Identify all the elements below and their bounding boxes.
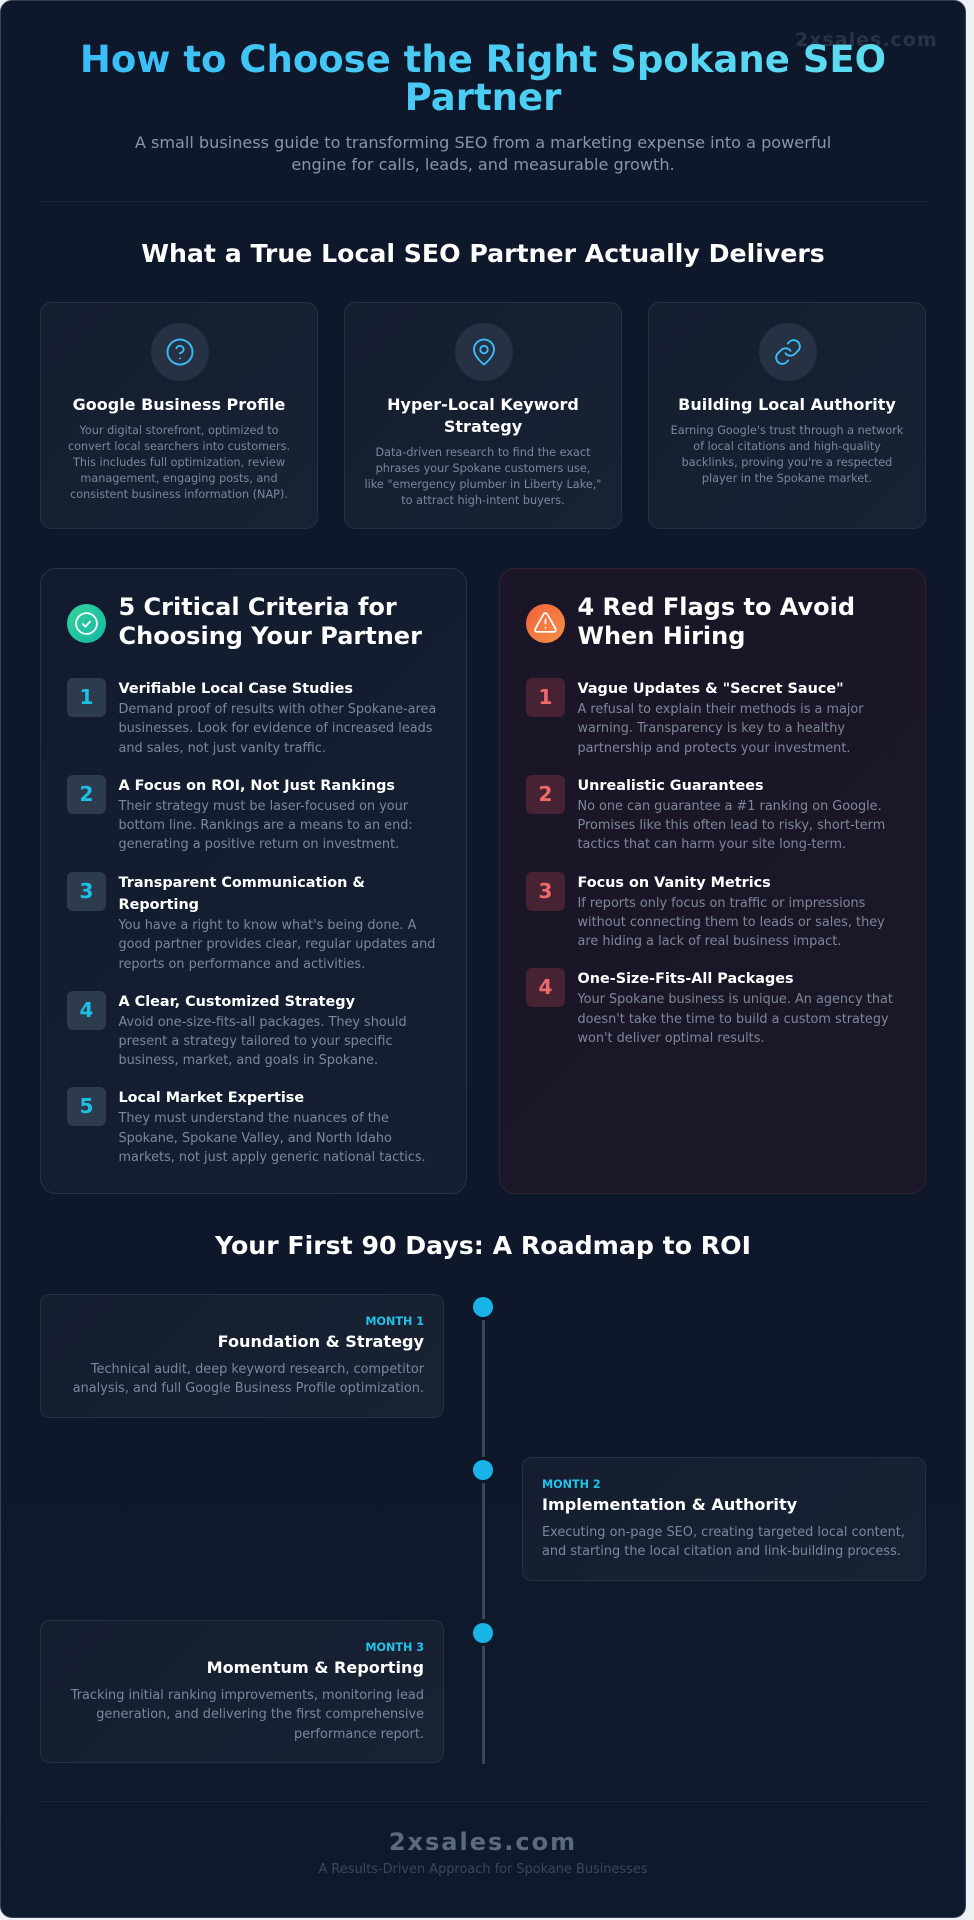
card heading: Google Business Profile <box>73 394 285 414</box>
item text: A refusal to explain their methods is a major <box>578 702 864 717</box>
card text: to attract high-intent buyers. <box>401 494 565 507</box>
item text: businesses. Look for evidence of increased leads <box>118 721 432 736</box>
item text: Spokane, Spokane Valley, and North Idaho <box>118 1131 392 1146</box>
timeline dot 1 <box>473 1297 493 1317</box>
item text: without connecting them to leads or sales, they <box>578 915 885 930</box>
footer divider <box>40 1801 926 1802</box>
card text: Your digital storefront, optimized to <box>80 424 278 436</box>
step text: generation, and delivering the first comprehensive <box>96 1707 424 1722</box>
panel: Google Business Profile <box>40 302 318 529</box>
item text <box>118 1015 407 1068</box>
item text: are hiding a lack of real business impact. <box>578 934 841 949</box>
number badge: 3 <box>539 879 552 903</box>
item heading <box>118 875 365 913</box>
watermark: 2xsales.com <box>795 29 938 51</box>
item text: Demand proof of results with other Spokane-area <box>118 702 436 717</box>
item text: won't deliver optimal results. <box>578 1031 764 1046</box>
step text <box>73 1362 424 1396</box>
step heading: Foundation & Strategy <box>218 1332 424 1351</box>
item heading: A Clear, Customized Strategy <box>118 994 355 1010</box>
number badge: 1 <box>80 685 93 709</box>
item text: tactics that can harm your site long-term. <box>578 837 846 852</box>
item text: Promises like this often lead to risky, short-term <box>578 818 885 833</box>
card text: phrases your Spokane customers use, <box>376 462 590 475</box>
number badge <box>67 991 106 1030</box>
footer tagline: A Results-Driven Approach for Spokane Businesses <box>318 1862 648 1877</box>
step text: Executing on-page SEO, creating targeted local content, <box>542 1525 905 1540</box>
panel: 4 red flags <box>499 568 926 1194</box>
number badge: 2 <box>539 782 552 806</box>
timeline line segment 2 <box>482 1483 484 1619</box>
number badge <box>67 1087 106 1126</box>
item text: markets, not just apply generic national tactics. <box>118 1150 426 1165</box>
panel heading: 4 Red Flags to Avoid <box>578 593 855 621</box>
card text <box>671 424 904 485</box>
month label: MONTH 1 <box>365 1315 424 1328</box>
subtitle <box>135 133 831 174</box>
item text <box>118 918 435 972</box>
item heading: Transparent Communication & <box>118 875 365 891</box>
card text: management, engaging posts, and <box>80 472 278 485</box>
red flag 2 <box>526 775 885 852</box>
panel heading <box>578 593 855 650</box>
icon: warning triangle <box>526 604 565 643</box>
header divider <box>40 201 926 202</box>
step text <box>542 1525 905 1559</box>
step text <box>70 1688 424 1742</box>
heading: roadmap: Your First 90 Days: A Roadmap to ROI <box>215 1231 751 1260</box>
item text: partnership and protects your investment. <box>578 741 850 756</box>
month label: MONTH 3 <box>365 1641 424 1654</box>
item heading: Vague Updates & "Secret Sauce" <box>578 681 844 697</box>
timeline card: month 1 <box>40 1294 444 1418</box>
step text: performance report. <box>294 1727 424 1742</box>
panel: 5 critical criteria <box>40 568 467 1194</box>
timeline card: month 3 <box>40 1620 444 1763</box>
panel: Hyper-Local Keyword Strategy <box>344 302 622 529</box>
criterion 2 <box>67 775 413 852</box>
number badge <box>526 775 565 814</box>
item text: good partner provides clear, regular updates and <box>118 937 435 952</box>
timeline dot 2 <box>473 1460 493 1480</box>
subtitle: engine for calls, leads, and measurable growth. <box>291 155 675 174</box>
item text: reports on performance and activities. <box>118 957 365 972</box>
item text: You have a right to know what's being done. A <box>118 918 416 933</box>
item text: They must understand the nuances of the <box>118 1111 389 1126</box>
item heading: Unrealistic Guarantees <box>578 778 764 794</box>
step heading: Momentum & Reporting <box>207 1658 424 1677</box>
icon: check circle <box>67 604 106 643</box>
step text: analysis, and full Google Business Profile optimization. <box>73 1381 424 1396</box>
item text: warning. Transparency is key to a healthy <box>578 721 845 736</box>
item text <box>578 702 864 756</box>
item heading: Focus on Vanity Metrics <box>578 875 771 891</box>
item text: business, market, and goals in Spokane. <box>118 1053 378 1068</box>
item heading: Verifiable Local Case Studies <box>118 681 353 697</box>
card text: consistent business information (NAP). <box>70 488 288 501</box>
title: How to Choose the Right Spokane SEO <box>80 38 886 81</box>
item text: If reports only focus on traffic or impressions <box>578 896 865 911</box>
number badge <box>526 968 565 1007</box>
timeline line segment 1 <box>482 1320 484 1457</box>
number badge <box>526 678 565 717</box>
item text: doesn't take the time to build a custom strategy <box>578 1012 889 1027</box>
card heading <box>387 394 579 436</box>
item text <box>118 799 413 852</box>
card text: of local citations and high-quality <box>693 440 881 453</box>
subtitle: A small business guide to transforming SEO from a marketing expense into a powerful <box>135 133 831 152</box>
item text <box>578 992 893 1046</box>
timeline dot 3 <box>473 1623 493 1643</box>
panel heading: Choosing Your Partner <box>118 622 422 650</box>
card heading: Hyper-Local Keyword <box>387 394 579 414</box>
item text: Your Spokane business is unique. An agency that <box>578 992 893 1007</box>
number badge: 3 <box>80 879 93 903</box>
card text: Earning Google's trust through a network <box>671 424 903 436</box>
item heading: A Focus on ROI, Not Just Rankings <box>118 778 395 794</box>
panel: Building Local Authority <box>648 302 926 529</box>
month label: MONTH 2 <box>542 1478 601 1491</box>
panel heading: 5 Critical Criteria for <box>118 593 397 621</box>
step text: Tracking initial ranking improvements, monitoring lead <box>71 1688 424 1703</box>
card heading: Strategy <box>444 417 522 436</box>
card text: convert local searchers into customers. <box>68 440 290 453</box>
heading: what a partner delivers: What a True Local SEO Partner Actually Delivers <box>141 239 825 268</box>
card text <box>68 424 290 501</box>
red flag 3 <box>526 872 885 949</box>
criterion 4 <box>67 991 407 1068</box>
card text: player in the Spokane market. <box>702 472 872 485</box>
item text <box>118 1111 426 1165</box>
icon: link <box>758 323 816 381</box>
item heading: One-Size-Fits-All Packages <box>578 971 794 987</box>
item text <box>118 702 436 756</box>
item text: bottom line. Rankings are a means to an end: <box>118 818 413 833</box>
item heading: Local Market Expertise <box>118 1090 304 1106</box>
red flag 1 <box>526 678 864 756</box>
icon: map pin <box>454 323 512 381</box>
criterion 1 <box>67 678 436 756</box>
panel heading: When Hiring <box>578 622 745 650</box>
footer brand: 2xsales.com <box>389 1828 577 1856</box>
panel heading <box>118 593 422 650</box>
number badge: 4 <box>80 998 93 1022</box>
number badge <box>67 872 106 911</box>
red flag 4 <box>526 968 893 1046</box>
title <box>80 38 886 119</box>
item text <box>578 799 885 852</box>
icon: question circle <box>150 323 208 381</box>
number badge <box>67 678 106 717</box>
timeline line segment 3 <box>482 1646 484 1764</box>
step heading: Implementation & Authority <box>542 1495 797 1514</box>
item text: No one can guarantee a #1 ranking on Google. <box>578 799 882 814</box>
criterion 3 <box>67 872 435 972</box>
step text: Technical audit, deep keyword research, competitor <box>91 1362 424 1377</box>
number badge <box>67 775 106 814</box>
card text: This includes full optimization, review <box>73 456 285 469</box>
number badge <box>526 872 565 911</box>
step text: and starting the local citation and link-building process. <box>542 1544 901 1559</box>
number badge: 5 <box>80 1094 93 1118</box>
number badge: 1 <box>539 685 552 709</box>
card text: like "emergency plumber in Liberty Lake," <box>364 478 602 491</box>
title: Partner <box>405 76 561 119</box>
card text: Data-driven research to find the exact <box>375 446 591 459</box>
card text: backlinks, proving you're a respected <box>682 456 892 469</box>
number badge: 4 <box>539 975 552 999</box>
item text: Their strategy must be laser-focused on your <box>118 799 408 814</box>
number badge: 2 <box>80 782 93 806</box>
item text: Avoid one-size-fits-all packages. They should <box>118 1015 407 1030</box>
card text <box>364 446 602 507</box>
item heading: Reporting <box>118 897 199 913</box>
item text <box>578 896 885 949</box>
item text: present a strategy tailored to your specific <box>118 1034 393 1049</box>
timeline card: month 2 <box>522 1457 926 1581</box>
item text: generating a positive return on investment. <box>118 837 399 852</box>
item text: and sales, not just vanity traffic. <box>118 741 326 756</box>
criterion 5 <box>67 1087 426 1165</box>
card heading: Building Local Authority <box>678 394 896 414</box>
